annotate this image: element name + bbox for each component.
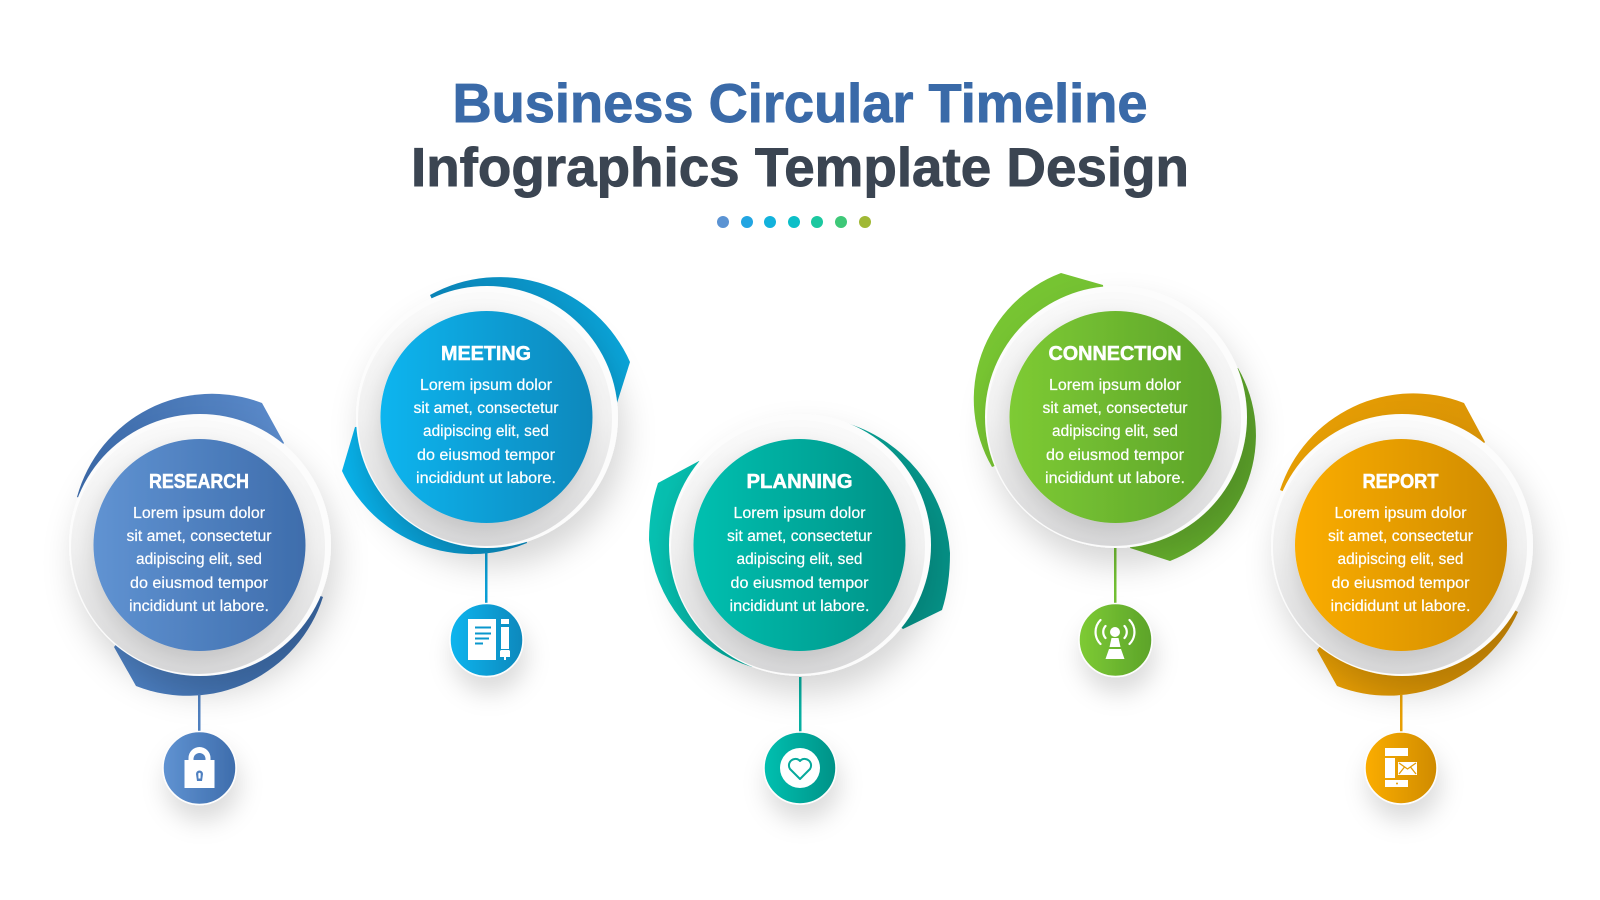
text: connection: incididunt ut labore. xyxy=(1045,470,1185,487)
disc: research xyxy=(94,439,306,651)
text: connection xyxy=(1042,343,1188,487)
step: connection xyxy=(974,273,1256,676)
text: meeting xyxy=(414,343,558,487)
connector: connection xyxy=(1114,548,1116,606)
text: report: incididunt ut labore. xyxy=(1330,598,1470,615)
dotted divider xyxy=(717,216,871,228)
disc: report xyxy=(1295,439,1507,651)
icon: heart xyxy=(764,732,836,804)
text: planning: incididunt ut labore. xyxy=(730,598,870,615)
text: planning: sit amet, consectetur xyxy=(727,528,872,545)
ribbon: connection left xyxy=(974,273,1116,467)
text: research: adipiscing elit, sed xyxy=(136,551,262,568)
text: report: adipiscing elit, sed xyxy=(1338,551,1464,568)
icon: antenna xyxy=(1079,604,1152,676)
text: research: sit amet, consectetur xyxy=(126,528,272,545)
text: meeting: incididunt ut labore. xyxy=(416,470,556,487)
step: meeting xyxy=(342,277,630,676)
text: meeting: do eiusmod tempor xyxy=(417,447,555,464)
icon: notebook and pen xyxy=(450,604,523,676)
text: meeting: adipiscing elit, sed xyxy=(423,423,549,440)
text: connection: CONNECTION xyxy=(1048,343,1182,365)
text: planning xyxy=(727,471,872,615)
icon: phone with mail xyxy=(1365,732,1437,804)
text: research: Lorem ipsum dolor xyxy=(133,505,265,522)
title xyxy=(411,73,1189,198)
text: planning: PLANNING xyxy=(746,471,852,493)
ribbon: research bottom xyxy=(114,545,323,696)
connector: research xyxy=(198,694,200,734)
connector: report xyxy=(1400,694,1402,734)
text: report xyxy=(1328,471,1473,615)
ribbon: report bottom xyxy=(1317,545,1518,696)
connector: planning xyxy=(799,677,802,733)
ribbon: planning right xyxy=(800,422,950,629)
text: report: REPORT xyxy=(1362,471,1438,493)
text: research: RESEARCH xyxy=(149,471,249,493)
ring: planning xyxy=(669,414,931,676)
title: Business Circular Timeline xyxy=(452,73,1148,134)
text: meeting: sit amet, consectetur xyxy=(414,400,558,417)
text: connection: do eiusmod tempor xyxy=(1046,447,1184,464)
ring: connection xyxy=(985,286,1247,548)
text: research: incididunt ut labore. xyxy=(129,598,269,615)
text: report: do eiusmod tempor xyxy=(1332,575,1470,592)
step: report xyxy=(1271,393,1533,804)
step: research xyxy=(69,394,331,804)
icon: lock xyxy=(163,732,236,804)
title: Infographics Template Design xyxy=(411,137,1189,198)
text: research: do eiusmod tempor xyxy=(130,575,268,592)
connector: meeting xyxy=(485,552,488,606)
disc: meeting xyxy=(380,311,592,523)
text: connection: sit amet, consectetur xyxy=(1042,400,1188,417)
text: planning: adipiscing elit, sed xyxy=(736,551,862,568)
ring: report xyxy=(1271,414,1533,676)
text: connection: Lorem ipsum dolor xyxy=(1049,377,1181,394)
ring: research xyxy=(69,414,331,676)
ribbon: connection right xyxy=(1116,368,1256,561)
ribbon: report top xyxy=(1280,393,1485,545)
ribbon: meeting top xyxy=(430,277,630,417)
text: planning: do eiusmod tempor xyxy=(730,575,868,592)
step: planning xyxy=(649,414,950,804)
text: meeting: MEETING xyxy=(441,343,531,365)
text: report: Lorem ipsum dolor xyxy=(1334,505,1466,522)
disc: connection xyxy=(1010,311,1222,523)
ribbon: planning left xyxy=(649,461,800,667)
disc: planning xyxy=(694,439,906,651)
text: meeting: Lorem ipsum dolor xyxy=(420,377,552,394)
text: report: sit amet, consectetur xyxy=(1328,528,1473,545)
ribbon: meeting bottom xyxy=(342,417,527,554)
text: planning: Lorem ipsum dolor xyxy=(734,505,866,522)
ribbon: research top xyxy=(77,394,284,545)
text: connection: adipiscing elit, sed xyxy=(1052,423,1178,440)
text: research xyxy=(126,471,272,615)
ring: meeting xyxy=(356,286,618,548)
